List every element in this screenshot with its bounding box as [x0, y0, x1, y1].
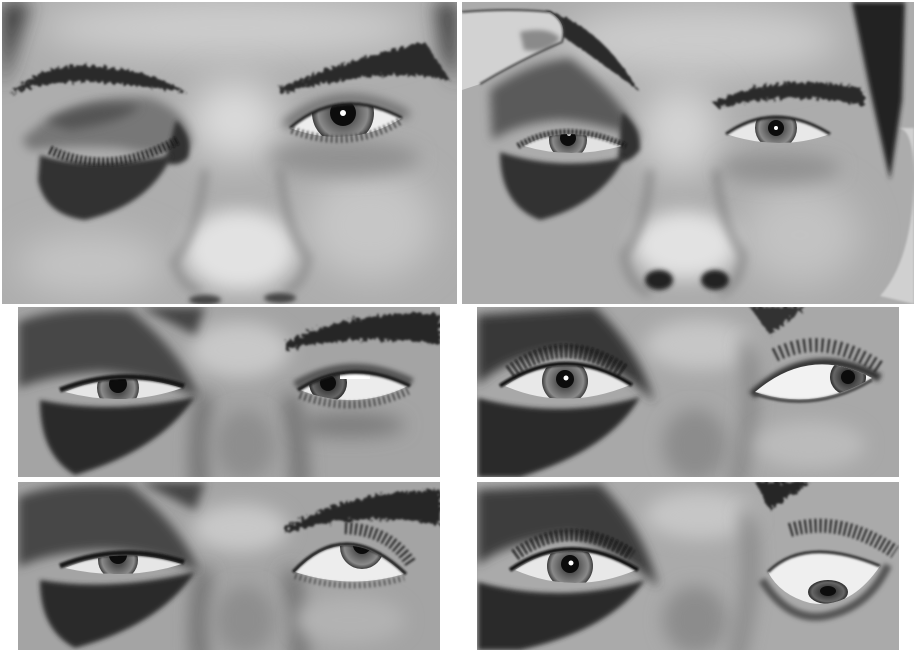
- bruise: under eye: [38, 155, 172, 220]
- eyebrow: right: [285, 490, 440, 533]
- eyebrow: left raised: [545, 10, 638, 90]
- bruise: upper lid: [18, 309, 200, 398]
- eyebrow: right: [712, 82, 866, 108]
- panel: gaze to the left: [477, 307, 899, 490]
- nose: [624, 170, 743, 294]
- right eye, looking down: [762, 526, 895, 617]
- finger: [462, 10, 564, 90]
- closed lid lashes: [50, 140, 178, 162]
- dark hair corners: [2, 2, 30, 90]
- panel: eyelid lifted by finger, frontal view: [462, 2, 914, 304]
- nose: [174, 170, 308, 305]
- eyebrow: right: [285, 314, 440, 350]
- nose bridge shading: [198, 395, 300, 490]
- bruise: upper lid: [477, 484, 658, 587]
- nose bridge shading: [198, 570, 300, 654]
- bruise: under eye: [478, 580, 645, 650]
- hair at right: [852, 2, 905, 180]
- bruise: under eye: [40, 572, 195, 648]
- panel: gaze upward: [18, 482, 440, 654]
- left eye: [516, 128, 627, 153]
- eyebrow: left: [10, 66, 186, 95]
- eyebrow fragment: [750, 307, 805, 335]
- nose bridge shading: [663, 340, 751, 490]
- bruise: under eye: [500, 152, 625, 220]
- right eye, looking sideways: [295, 364, 412, 437]
- nose bridge shading: [663, 510, 751, 654]
- right eye: [270, 82, 420, 176]
- bruise: upper lid: [18, 484, 200, 572]
- panel: gaze to the right: [18, 307, 440, 490]
- right eye, looking up: [293, 525, 412, 586]
- panel: gaze downward: [477, 482, 899, 654]
- bruise: under eye: [478, 397, 640, 477]
- bruise: upper lid: [477, 307, 654, 402]
- right eye: [720, 107, 840, 183]
- left eye: [500, 351, 632, 404]
- right eye, looking sideways: [752, 345, 880, 401]
- bruise: swollen upper lid: [22, 97, 192, 153]
- bruise: upper lid: [490, 58, 642, 140]
- left eye: [58, 549, 186, 574]
- left eye: [58, 373, 186, 399]
- ear: [880, 128, 914, 304]
- panel: eyes closed with bruised left eyelid, frontal view: [2, 0, 457, 305]
- left eye: [510, 535, 638, 589]
- eyebrow: right: [280, 42, 450, 94]
- eyebrow fragment: [755, 482, 810, 510]
- bruise: under eye: [40, 397, 195, 475]
